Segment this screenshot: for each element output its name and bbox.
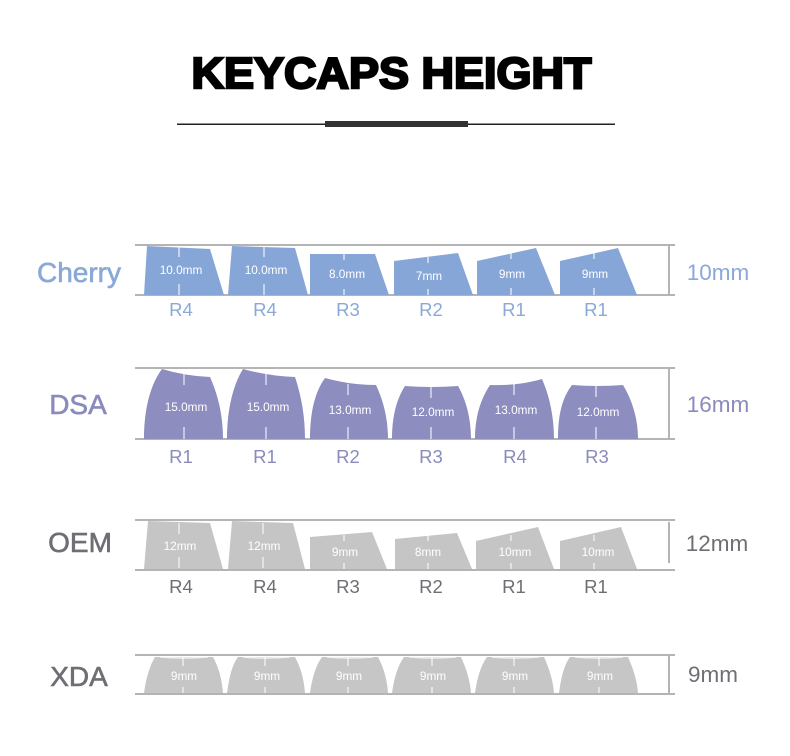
- row labels: R1: [253, 446, 277, 467]
- keycap R3 9mm: 9mm: [332, 545, 358, 559]
- keycap R1 10mm second: 10mm: [582, 545, 615, 559]
- row labels: R3: [419, 446, 443, 467]
- keycap 9mm six: [559, 657, 638, 693]
- keycap R1 10mm: 10mm: [499, 545, 532, 559]
- keycap 9mm three: [310, 657, 388, 693]
- keycap R2 8mm: [395, 533, 472, 569]
- row labels: R4: [169, 576, 193, 597]
- keycap R1 10mm: [476, 527, 554, 569]
- keycap 9mm four: [392, 657, 471, 693]
- keycap R1 15.0mm: [144, 369, 223, 439]
- keycap R3 12.0mm: 12.0mm: [412, 405, 454, 419]
- panel: OEM profile: [48, 520, 748, 597]
- profile name: XDA: XDA: [50, 661, 108, 692]
- keycap 9mm one: 9mm: [171, 669, 197, 683]
- keycap R1 9mm second: [560, 248, 637, 295]
- keycap 9mm six: 9mm: [587, 669, 613, 683]
- panel: Cherry profile: [37, 245, 749, 320]
- keycap R1 15.0mm second: 15.0mm: [247, 400, 289, 414]
- height frame: [135, 245, 675, 295]
- keycap R1 9mm second: 9mm: [582, 267, 608, 281]
- row labels: R1: [502, 299, 526, 320]
- row labels: [169, 576, 608, 597]
- profile name: Cherry: Cherry: [37, 257, 121, 288]
- keycap R3 8.0mm: 8.0mm: [329, 267, 365, 281]
- panel: XDA profile: [50, 655, 738, 694]
- keycap 9mm three: 9mm: [336, 669, 362, 683]
- title: KEYCAPS HEIGHT: [192, 49, 592, 98]
- keycap R1 9mm: [477, 248, 555, 295]
- title divider: [177, 121, 615, 127]
- row labels: [169, 299, 608, 320]
- row labels: R1: [584, 299, 608, 320]
- row labels: R4: [503, 446, 527, 467]
- keycap R4 10.0mm: 10.0mm: [160, 263, 202, 277]
- row labels: R2: [419, 299, 443, 320]
- keycap 9mm one: [144, 657, 223, 693]
- keycap R1 9mm: 9mm: [499, 267, 525, 281]
- keycap R4 10.0mm: [144, 246, 224, 295]
- keycap R4 13.0mm: 13.0mm: [495, 403, 537, 417]
- row labels: R1: [169, 446, 193, 467]
- keycap R3 12.0mm second: [558, 385, 638, 439]
- keycap R3 12.0mm: [392, 386, 471, 439]
- keycap R1 10mm second: [560, 527, 637, 569]
- keycap R2 13.0mm: [310, 378, 388, 439]
- keycap R2 7mm: 7mm: [416, 269, 442, 283]
- height frame: [135, 368, 675, 439]
- height frame: [135, 655, 675, 694]
- row labels: R1: [502, 576, 526, 597]
- keycap R1 15.0mm second: [227, 369, 305, 439]
- keycap 9mm five: 9mm: [502, 669, 528, 683]
- row labels: R1: [584, 576, 608, 597]
- keycap R2 8mm: 8mm: [415, 545, 441, 559]
- row labels: [169, 446, 609, 467]
- keycap 9mm four: 9mm: [420, 669, 446, 683]
- keycap 9mm two: [227, 657, 305, 693]
- total height: 12mm: [686, 531, 748, 556]
- panel: DSA profile: [49, 368, 749, 467]
- row labels: R3: [585, 446, 609, 467]
- profile name: DSA: DSA: [49, 389, 107, 420]
- keycap R4 12mm: 12mm: [164, 539, 197, 553]
- keycap R1 15.0mm: 15.0mm: [165, 400, 207, 414]
- row labels: R4: [253, 299, 277, 320]
- keycap R3 9mm: [310, 532, 387, 569]
- total height: 16mm: [687, 392, 749, 417]
- row labels: R3: [336, 299, 360, 320]
- row labels: R2: [336, 446, 360, 467]
- row labels: R4: [169, 299, 193, 320]
- keycap 9mm five: [475, 657, 554, 693]
- keycap R4 10.0mm second: [228, 246, 308, 295]
- row labels: R2: [419, 576, 443, 597]
- keycap R4 12mm second: 12mm: [248, 539, 281, 553]
- total height: 10mm: [687, 260, 749, 285]
- keycap R4 13.0mm: [475, 379, 554, 439]
- keycap R4 12mm: [144, 521, 223, 569]
- profile name: OEM: OEM: [48, 527, 112, 558]
- row labels: R3: [336, 576, 360, 597]
- total height: 9mm: [688, 662, 738, 687]
- keycap R4 12mm second: [228, 521, 305, 569]
- row labels: R4: [253, 576, 277, 597]
- keycap R2 13.0mm: 13.0mm: [329, 403, 371, 417]
- keycap R3 12.0mm second: 12.0mm: [577, 405, 619, 419]
- height frame: [135, 520, 675, 570]
- keycap R3 8.0mm: [310, 254, 389, 295]
- keycap R2 7mm: [394, 253, 473, 295]
- keycap 9mm two: 9mm: [254, 669, 280, 683]
- keycap R4 10.0mm second: 10.0mm: [245, 263, 287, 277]
